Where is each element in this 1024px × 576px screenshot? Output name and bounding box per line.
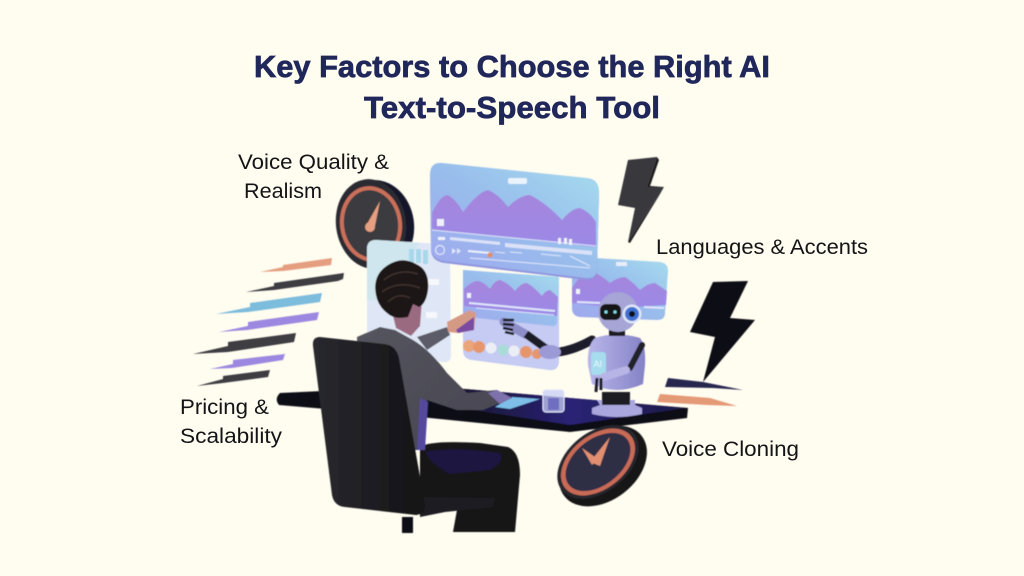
- robot AI badge: AI: [594, 359, 602, 369]
- desk: [277, 386, 688, 432]
- illustration: AI text-to-speech workspace: [193, 157, 755, 533]
- label: languages and accents: Languages & Accents: [656, 236, 868, 259]
- raised arm: [417, 327, 450, 350]
- robot: [503, 292, 645, 417]
- label: voice quality: Realism: [244, 180, 322, 203]
- robot AI badge: [591, 352, 606, 375]
- person neck and face: [392, 300, 422, 336]
- person hair: [375, 260, 428, 318]
- label: pricing and scalability: Scalability: [180, 425, 283, 448]
- label: pricing and scalability: [180, 396, 283, 448]
- icon: lightning bolt top: [618, 157, 664, 243]
- person torso and arms: [357, 310, 512, 450]
- panel: lower centre screen: [463, 270, 559, 370]
- water glass: [543, 390, 564, 412]
- robot neck: [609, 328, 625, 336]
- icon: speed strips: [193, 258, 344, 386]
- icon: wall clock: [543, 409, 663, 523]
- label: voice quality: Voice Quality &: [238, 151, 389, 174]
- robot head: [598, 292, 638, 332]
- hand: [447, 310, 476, 333]
- icon: speed gauge: [330, 175, 420, 275]
- icon: peach strip: [657, 394, 737, 406]
- robot side arm: [630, 345, 642, 368]
- person legs: [420, 442, 520, 532]
- colour swatches on the lower screen: [463, 340, 542, 359]
- robot body: [588, 334, 645, 390]
- icon: lightning bolt right on stand: [665, 281, 755, 390]
- label: pricing and scalability: Pricing &: [180, 396, 269, 419]
- panel: large main screen: [430, 163, 599, 280]
- title: Key Factors to Choose the Right AI: [254, 49, 770, 84]
- robot arm and hand: [503, 320, 592, 359]
- robot base: [592, 400, 642, 417]
- label: voice cloning: Voice Cloning: [662, 438, 799, 461]
- panel: left glass screen: [367, 240, 451, 362]
- title: Text-to-Speech Tool: [364, 90, 660, 125]
- panel: right screen: [572, 257, 668, 320]
- title: [254, 49, 770, 125]
- office chair: [313, 337, 495, 533]
- label: voice quality: [238, 151, 389, 203]
